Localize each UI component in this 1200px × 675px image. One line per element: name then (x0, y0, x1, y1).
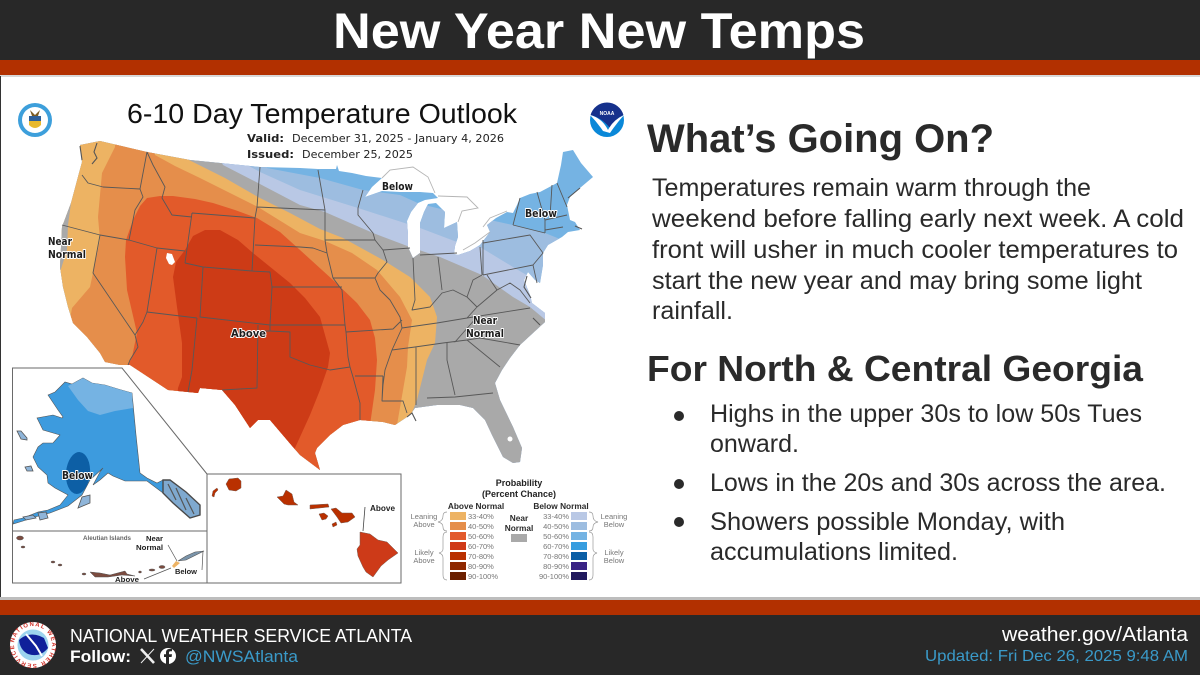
footer bar (0, 615, 1200, 675)
map labels: Near (48, 235, 72, 248)
below normal swatches: 70-80% (543, 552, 569, 561)
bracket labels (411, 512, 627, 565)
bracket labels: Leaning (601, 512, 627, 521)
band: below 50-60 (60, 141, 593, 470)
legend: Below Normal (533, 501, 589, 511)
chart: Alaska inset (13, 378, 200, 524)
map title: 6-10 Day Temperature Outlook (127, 98, 518, 129)
chart: Aleutian Islands inset: Near (146, 534, 163, 543)
below normal swatches: 50-60% (543, 532, 569, 541)
footer follow line (70, 647, 299, 666)
icon: NOAA logo (590, 102, 624, 137)
valid dates: Valid: (247, 132, 284, 145)
text block: summary: front will usher in much cooler temperatures to (652, 236, 1178, 264)
panhandle (163, 480, 200, 518)
below normal swatches: 40-50% (543, 522, 569, 531)
bracket labels: Leaning (411, 512, 437, 521)
text block: summary: rainfall. (652, 297, 733, 325)
bracket labels: Likely (414, 548, 434, 557)
alaska 70-80 area (64, 451, 92, 495)
coast details (80, 143, 582, 421)
bracket labels: Below (604, 520, 625, 529)
above normal swatches: 80-90% (468, 562, 494, 571)
map labels: Near (473, 314, 497, 327)
icon: NOAA logo: NOAA (600, 111, 615, 117)
below normal swatches: 60-70% (543, 542, 569, 551)
chart: Hawaii inset: Above (370, 504, 396, 513)
salt lake and lake okeechobee (166, 253, 512, 442)
bullet list: onward. (710, 430, 799, 458)
alaska label: Below (62, 469, 93, 482)
heading: what's going on: What’s Going On? (647, 117, 994, 161)
near normal key (505, 513, 533, 542)
footer follow line: @NWSAtlanta (185, 647, 299, 666)
map labels (48, 180, 557, 340)
bullet list: Highs in the upper 30s to low 50s Tues (710, 400, 1142, 428)
near normal key: Near (510, 513, 529, 523)
bullet list: Showers possible Monday, with (710, 508, 1065, 536)
valid dates: December 25, 2025 (302, 148, 413, 161)
bullet list (674, 400, 1166, 566)
above normal swatches: 50-60% (468, 532, 494, 541)
footer accent band (0, 600, 1200, 615)
icon: facebook (160, 648, 176, 664)
near normal key: Normal (505, 523, 533, 533)
band: west near normal (60, 204, 71, 270)
below normal swatches: 33-40% (543, 512, 569, 521)
below normal swatches: 90-100% (539, 572, 569, 581)
band: above 33-40 (60, 141, 437, 446)
bracket labels: Likely (604, 548, 624, 557)
band: below 40-50 (194, 160, 558, 457)
text block: summary (651, 174, 1184, 325)
text block: summary: Temperatures remain warm through the (652, 174, 1091, 202)
band: above 60-70 (173, 230, 330, 449)
chart: Aleutian Islands inset (16, 534, 204, 584)
footer updated timestamp: Updated: Fri Dec 26, 2025 9:48 AM (925, 648, 1188, 665)
map labels: Normal (466, 327, 504, 340)
legend (411, 478, 627, 581)
brackets (438, 512, 598, 580)
chart: Aleutian Islands inset: Normal (136, 543, 163, 552)
chart: US temperature outlook map (60, 141, 593, 470)
above normal swatches: 90-100% (468, 572, 498, 581)
below normal swatches (539, 512, 587, 581)
legend heading: Probability (496, 478, 542, 488)
legend heading: (Percent Chance) (482, 489, 556, 499)
text block: summary: weekend before falling early next week. A cold (651, 205, 1184, 233)
icon: Department of Commerce seal (18, 103, 52, 137)
band: near normal (60, 141, 545, 470)
footer website: weather.gov/Atlanta (1001, 624, 1189, 646)
chart: Aleutian Islands inset: Aleutian Islands (83, 536, 132, 542)
map labels: Above (231, 327, 266, 340)
chart: Hawaii inset (212, 478, 398, 577)
text block: summary: start the new year and may bring some light (652, 267, 1142, 295)
bracket labels: Above (413, 556, 435, 565)
chart: Aleutian Islands inset: Below (175, 567, 197, 576)
panel: map (0, 75, 1200, 600)
inset frames (12, 368, 401, 583)
header accent band (0, 60, 1200, 75)
band: above 40-50 (70, 144, 412, 470)
footer follow line: Follow: (70, 647, 131, 666)
great lakes outlines (382, 167, 507, 250)
heading: for north and central georgia: For North & Central Georgia (647, 348, 1144, 389)
above normal swatches: 70-80% (468, 552, 494, 561)
icon: X (141, 649, 154, 663)
state borders (62, 152, 567, 420)
above normal swatches (450, 512, 498, 581)
header bar (0, 0, 1200, 60)
above normal swatches: 40-50% (468, 522, 494, 531)
above normal swatches: 33-40% (468, 512, 494, 521)
bullet list: accumulations limited. (710, 538, 958, 566)
alaska 50-60 area (68, 378, 133, 415)
bullet list: Lows in the 20s and 30s across the area. (710, 469, 1166, 497)
icon: NWS logo: NATIONAL WEATHER SERVICE (10, 622, 56, 668)
legend: Above Normal (448, 501, 504, 511)
islands (17, 431, 90, 520)
valid dates: December 31, 2025 - January 4, 2026 (292, 132, 504, 145)
chart: Aleutian Islands inset: Above (115, 575, 139, 584)
valid dates (247, 132, 504, 161)
map labels: Below (382, 180, 413, 193)
title: New Year New Temps (333, 3, 865, 59)
valid dates: Issued: (247, 148, 294, 161)
band: below 33-40 (222, 163, 545, 320)
map labels: Below (525, 207, 557, 220)
below normal swatches: 80-90% (543, 562, 569, 571)
map labels: Normal (48, 248, 86, 261)
above normal swatches: 60-70% (468, 542, 494, 551)
bracket labels: Above (413, 520, 435, 529)
footer office name: NATIONAL WEATHER SERVICE ATLANTA (70, 626, 412, 646)
legend heading (482, 478, 556, 499)
band: above 50-60 (125, 196, 377, 490)
bracket labels: Below (604, 556, 625, 565)
